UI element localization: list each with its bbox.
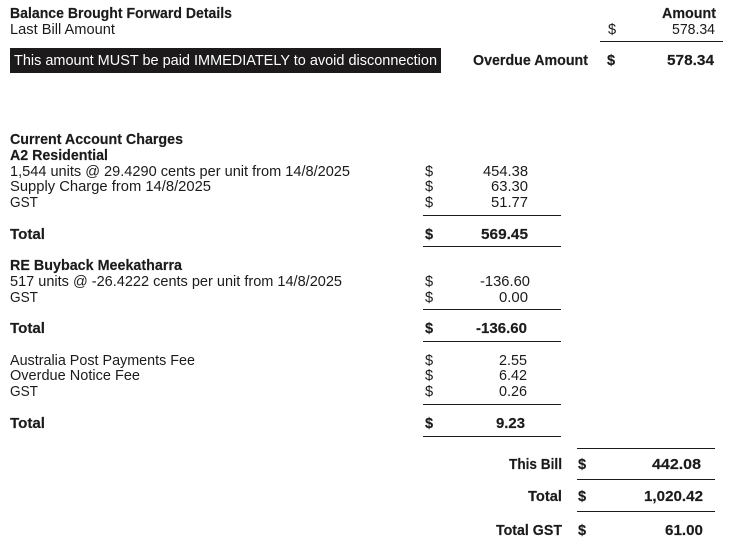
row: total GST: Total GST xyxy=(496,523,562,539)
row: buyback total xyxy=(10,321,527,337)
row: units: $ xyxy=(425,164,433,180)
row: overdue amount: 578.34 xyxy=(667,53,715,69)
row: total: Total xyxy=(528,489,562,505)
row: A2 total: Total xyxy=(10,227,45,243)
row: A2 total: $ xyxy=(425,227,433,243)
row: overdue notice fee xyxy=(10,368,527,384)
row: buyback units: -136.60 xyxy=(480,274,530,290)
row: buyback GST: 0.00 xyxy=(499,290,528,306)
heading: current account charges: Current Account Charges xyxy=(10,132,183,148)
row: fees total: $ xyxy=(425,416,433,432)
row: last bill amount: $ xyxy=(608,22,616,38)
row: australia post fee xyxy=(10,353,527,369)
row: fees GST xyxy=(10,384,527,400)
row: this bill: $ xyxy=(578,457,586,473)
row: A2 total: 569.45 xyxy=(481,227,528,243)
row: GST: $ xyxy=(425,195,433,211)
row: supply charge: $ xyxy=(425,179,433,195)
row: overdue amount: Overdue Amount xyxy=(473,53,588,69)
row: last bill amount xyxy=(10,22,715,38)
row: buyback units xyxy=(10,274,530,290)
row: units: 1,544 units @ 29.4290 cents per unit from 14/8/2025 xyxy=(10,164,350,180)
row: supply charge xyxy=(10,179,528,195)
row: GST xyxy=(10,195,528,211)
row: buyback total: Total xyxy=(10,321,45,337)
row: fees GST: 0.26 xyxy=(499,384,527,400)
row: fees total: Total xyxy=(10,416,45,432)
row: overdue notice fee: 6.42 xyxy=(499,368,527,384)
row: buyback units: $ xyxy=(425,274,433,290)
row: total GST: 61.00 xyxy=(665,523,703,539)
row: supply charge: Supply Charge from 14/8/2025 xyxy=(10,179,211,195)
row: fees total xyxy=(10,416,525,432)
subheading: A2 residential: A2 Residential xyxy=(10,148,108,164)
row: australia post fee: $ xyxy=(425,353,433,369)
row: overdue amount: $ xyxy=(607,53,615,69)
row: buyback total: $ xyxy=(425,321,433,337)
row: units xyxy=(10,164,528,180)
row: this bill xyxy=(509,457,701,473)
section: balance brought forward xyxy=(10,6,723,73)
row: fees total: 9.23 xyxy=(496,416,525,432)
row: last bill amount: Last Bill Amount xyxy=(10,22,115,38)
row: A2 total xyxy=(10,227,528,243)
row: total: 1,020.42 xyxy=(644,489,703,505)
row: buyback units: 517 units @ -26.4222 cents per unit from 14/8/2025 xyxy=(10,274,342,290)
row: buyback GST xyxy=(10,290,528,306)
section: bill summary xyxy=(496,448,715,539)
row: overdue notice fee: Overdue Notice Fee xyxy=(10,368,140,384)
heading: balance brought forward details: Balance Brought Forward Details xyxy=(10,6,232,22)
row: total: $ xyxy=(578,489,586,505)
row: overdue amount xyxy=(473,53,715,69)
row: buyback GST: GST xyxy=(10,290,38,306)
row: buyback total: -136.60 xyxy=(476,321,527,337)
row: buyback GST: $ xyxy=(425,290,433,306)
section: current account charges xyxy=(10,132,561,436)
callout: disconnection warning xyxy=(10,48,441,73)
row: GST: GST xyxy=(10,195,38,211)
row: total xyxy=(528,489,703,505)
row: australia post fee: 2.55 xyxy=(499,353,527,369)
row: last bill amount: 578.34 xyxy=(672,22,715,38)
row: supply charge: 63.30 xyxy=(491,179,528,195)
row: australia post fee: Australia Post Payments Fee xyxy=(10,353,195,369)
row: this bill: This Bill xyxy=(509,457,562,473)
row: total GST xyxy=(496,523,703,539)
row: units: 454.38 xyxy=(483,164,528,180)
heading: amount: Amount xyxy=(662,6,716,22)
row: fees GST: $ xyxy=(425,384,433,400)
row: fees GST: GST xyxy=(10,384,38,400)
row: this bill: 442.08 xyxy=(652,457,701,473)
callout: disconnection warning: This amount MUST be paid IMMEDIATELY to avoid disconnection xyxy=(14,53,437,69)
row: overdue notice fee: $ xyxy=(425,368,433,384)
row: GST: 51.77 xyxy=(491,195,528,211)
subheading: RE buyback: RE Buyback Meekatharra xyxy=(10,258,183,274)
row: total GST: $ xyxy=(578,523,586,539)
